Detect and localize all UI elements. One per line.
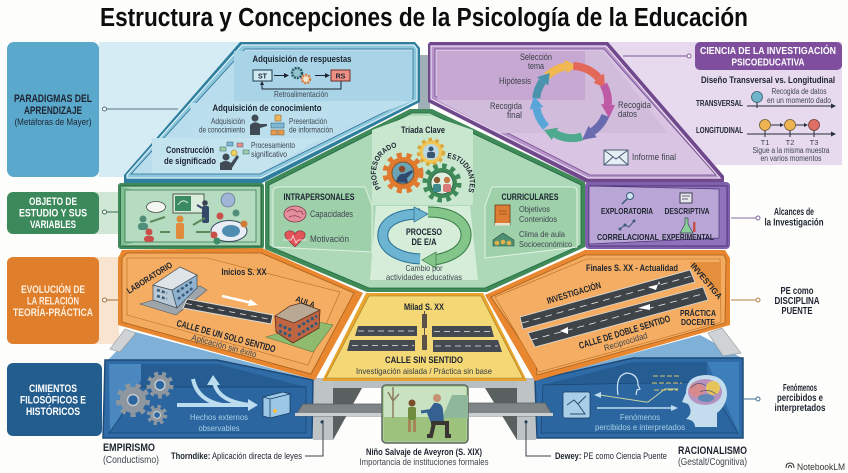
grey supports and light-blue slants [108, 55, 742, 440]
caption: empirismo [103, 442, 159, 466]
icon: orange gear teacher [385, 155, 421, 191]
block: construcción de significado: Construcción [166, 145, 214, 156]
label panel: paradigmas del aprendizaje: (Metáforas de Mayer) [14, 117, 92, 127]
panel: left orange laboratory street [118, 248, 363, 380]
icon: gears [118, 374, 172, 424]
box: intrapersonales: Motivación [310, 234, 349, 244]
panel: design research background: PSICOEDUCATIVA [732, 56, 805, 68]
block: adquisición de respuestas: ST [258, 74, 268, 80]
box: curriculares: CURRICULARES [502, 192, 558, 202]
text: cambio [386, 263, 462, 282]
panel: yellow street without direction: Milad S. XX [404, 302, 444, 312]
label panel: paradigmas del aprendizaje: APRENDIZAJE [24, 105, 82, 117]
block: adquisición de respuestas: RS [336, 74, 346, 80]
label: alcances [764, 207, 824, 228]
panel: right orange two-way street [485, 250, 730, 381]
caption: empirismo: (Conductismo) [103, 455, 159, 466]
icon: cube [263, 392, 290, 418]
box: curriculares: Objetivos [519, 204, 550, 214]
label: laboratorio: LABORATORIO [125, 259, 174, 296]
label panel: evolución teoría-práctica [7, 257, 119, 344]
cycle labels: final [507, 110, 522, 120]
label: alcances: la Investigación [764, 218, 824, 228]
panel: yellow street without direction: CALLE SIN SENTIDO [385, 355, 463, 366]
label: PE como disciplina puente: PUENTE [782, 306, 813, 317]
panel: left orange laboratory street: CALLE DE UN SOLO SENTIDO [175, 318, 277, 355]
box: curriculares [485, 187, 577, 258]
cycle labels: Selección [520, 52, 552, 62]
label panel: paradigmas del aprendizaje [7, 42, 250, 177]
block: adquisición de conocimiento: Adquisición [211, 116, 245, 126]
caption: dewey: Dewey: PE como Ciencia Puente [555, 451, 667, 461]
transversal timeline: Recogida de datos [772, 87, 826, 96]
block: construcción de significado [164, 140, 295, 170]
block: construcción de significado: de significado [164, 156, 216, 167]
panel: empirismo base: observables [198, 423, 240, 433]
transversal timeline [696, 87, 836, 108]
icon: correlation chart [618, 220, 636, 230]
icon: heart [283, 231, 307, 247]
panel: left orange laboratory street: Inicios S. XX [222, 267, 266, 277]
panel: yellow street without direction: Investigación aislada / Práctica sin base [356, 366, 492, 376]
box: curriculares: Socioeconómico [519, 239, 572, 249]
longitudinal timeline: Sigue a la misma muestra [752, 146, 830, 155]
block: construcción de significado: Procesamiento [251, 140, 295, 150]
arrows: external facts [177, 375, 258, 411]
longitudinal timeline: T2 [786, 138, 794, 147]
box: intrapersonales: Capacidades [310, 209, 353, 219]
caption: empirismo: EMPIRISMO [103, 442, 155, 454]
arrows: phenomena [594, 376, 682, 411]
panel: paradigmas trapezoid [124, 42, 420, 183]
box: curriculares: Contenidos [519, 214, 557, 224]
icon: laboratory building [140, 267, 207, 315]
icon: blackboard [173, 194, 204, 213]
road: two-way lower [528, 287, 708, 347]
panel: right orange two-way street: DOCENTE [681, 317, 715, 327]
panel: racionalismo base: Fenómenos [620, 412, 660, 422]
panel: right orange two-way street: PRÁCTICA [680, 308, 716, 318]
panel: left orange laboratory street: AULA [294, 294, 316, 310]
caption: racionalismo [678, 445, 747, 468]
icon: green gear students [425, 166, 459, 200]
icon: teacher [197, 200, 209, 223]
label panel: objeto de estudio: OBJETO DE [29, 196, 77, 208]
icon: round table [210, 220, 248, 244]
icon: thought cloud [146, 202, 166, 212]
caption: dewey [524, 420, 667, 461]
panel: right orange two-way street: INVESTIGACIÓN [545, 279, 602, 306]
caption: niño salvaje [360, 447, 489, 467]
caption: niño salvaje: Niño Salvaje de Aveyron (S. XIX) [366, 447, 482, 457]
label panel: cimientos filosóficos: HISTÓRICOS [26, 405, 80, 418]
label: fenómenos percibidos [744, 383, 826, 414]
longitudinal timeline: T3 [810, 138, 818, 147]
label panel: cimientos filosóficos: CIMIENTOS [29, 383, 77, 395]
arrow: one way [222, 296, 258, 306]
road sections [347, 326, 502, 352]
box: curriculares: Clima de aula [519, 229, 565, 239]
label: fenómenos percibidos: percibidos e [777, 393, 823, 404]
label: fenómenos percibidos: interpretados [774, 403, 826, 414]
box: intrapersonales: INTRAPERSONALES [284, 192, 354, 202]
panel: design research background [608, 42, 842, 165]
icon: book [495, 205, 510, 226]
panel: left orange laboratory street: Aplicación sin éxito [190, 332, 258, 359]
label panel: evolución teoría-práctica: TEORÍA-PRÁCTICA [13, 306, 93, 319]
cycle labels [490, 52, 651, 120]
caption: niño salvaje: Importancia de instituciones formales [360, 457, 489, 467]
cycle diagram [530, 60, 615, 140]
icon: perception box [563, 392, 590, 418]
transversal timeline: en un momento dado [767, 96, 831, 105]
label panel: cimientos filosóficos: FILOSÓFICOS E [20, 394, 86, 406]
block: adquisición de conocimiento: Presentación [289, 116, 327, 126]
label panel: paradigmas del aprendizaje: PARADIGMAS DEL [14, 93, 92, 105]
icon: envelope [604, 150, 628, 165]
caption: thorndike [171, 420, 324, 461]
panel: central green hexagon [265, 109, 585, 292]
icon: tower [422, 311, 427, 350]
road: one way [183, 299, 273, 324]
title: Estructura y Concepciones de la Psicología de la Educación [100, 4, 748, 32]
label: PE como disciplina puente: DISCIPLINA [774, 296, 820, 307]
panel: alcances de la investigación: EXPLORATORIA [601, 206, 653, 216]
longitudinal timeline: en varios momentos [760, 154, 822, 163]
label panel: evolución teoría-práctica: EVOLUCIÓN DE [21, 283, 85, 296]
panel: central green hexagon: Tríada Clave [401, 125, 445, 136]
block: adquisición de conocimiento: de información [289, 124, 333, 134]
panel: right orange two-way street: Finales S. XX - Actualidad [586, 263, 678, 273]
panel: objeto de estudio illustration [118, 183, 264, 249]
panel: empirismo base: Hechos externos [190, 412, 248, 422]
panel: niño salvaje picture [382, 385, 468, 443]
label panel: objeto de estudio: ESTUDIO Y SUS [19, 208, 87, 220]
panel: investigación trapezoid [428, 42, 724, 183]
cycle labels: Hipótesis [499, 76, 531, 86]
panel: alcances de la investigación [585, 182, 760, 249]
block: construcción de significado: significativo [251, 149, 287, 159]
panel: yellow street without direction [322, 293, 527, 381]
cycle labels: Recogida [490, 101, 522, 111]
panel: right orange two-way street: INVESTIGA [688, 261, 724, 301]
icon: brain head [682, 375, 727, 427]
transversal timeline: TRANSVERSAL [696, 99, 743, 108]
caption: racionalismo: RACIONALISMO [678, 445, 747, 457]
cycle labels: datos [618, 109, 637, 119]
icon: kneeling man [421, 394, 451, 436]
label panel: evolución teoría-práctica: LA RELACIÓN [27, 294, 79, 308]
cycle: proceso de E/A: DE E/A [412, 237, 437, 247]
panel: racionalismo base: percibidos e interpretados [595, 422, 685, 432]
longitudinal timeline: T1 [761, 138, 769, 147]
icon: small head [617, 373, 640, 395]
icon: document [680, 193, 692, 203]
label panel: objeto de estudio: VARIABLES [30, 219, 76, 231]
text: cambio: Cambio por [406, 263, 443, 273]
block: adquisición de conocimiento: de conocimiento [199, 124, 245, 134]
cycle labels: tema [528, 61, 544, 71]
label: PE como disciplina puente: PE como [780, 286, 814, 297]
block: adquisición de respuestas [252, 54, 352, 99]
panel: right orange two-way street: Reciprocidad [603, 330, 649, 353]
block: adquisición de respuestas: Adquisición de respuestas [252, 54, 352, 65]
longitudinal timeline: LONGITUDINAL [696, 126, 743, 135]
curved label: estudiantes: ESTUDIANTES [447, 152, 475, 192]
cycle: proceso de E/A: PROCESO [406, 227, 442, 237]
icon: group [493, 233, 514, 246]
panel: alcances de la investigación: DESCRIPTIVA [664, 206, 710, 216]
panel: right orange two-way street: CALLE DE DOBLE SENTIDO [578, 314, 672, 352]
road: two-way upper [520, 270, 695, 329]
longitudinal timeline [696, 120, 836, 163]
label: alcances: Alcances de [774, 207, 814, 218]
curved label: profesorado: PROFESORADO [370, 142, 396, 190]
icon: magnifier [622, 192, 634, 204]
cycle: proceso de E/A [383, 207, 466, 268]
block: adquisición de respuestas: Retroalimentación [274, 90, 328, 99]
icon: child [408, 400, 416, 432]
caption: thorndike: Thorndike: Aplicación directa de leyes [171, 451, 302, 461]
box: intrapersonales [273, 187, 372, 252]
arrows [150, 217, 210, 232]
panel: investigación trapezoid: Informe final [632, 152, 676, 162]
label: fenómenos percibidos: Fenómenos [783, 383, 817, 394]
cycle labels: Recogida [618, 100, 651, 110]
block: adquisición de conocimiento [199, 103, 333, 135]
bridge planks [295, 403, 553, 416]
label panel: cimientos filosóficos [7, 363, 102, 436]
logo: NotebookLM: NotebookLM [797, 462, 845, 472]
icon: classroom building [266, 303, 333, 352]
icon: brain [284, 206, 306, 222]
panel: alcances de la investigación: CORRELACIONAL [597, 232, 659, 242]
icon: students [138, 193, 240, 242]
block: adquisición de conocimiento: Adquisición de conocimiento [212, 103, 322, 114]
label panel: objeto de estudio [7, 192, 119, 234]
panel: racionalismo base [535, 358, 743, 438]
label: PE como disciplina puente [731, 286, 820, 317]
icon: yellow gear [418, 140, 444, 164]
panel: empirismo base [103, 360, 313, 438]
panel: alcances de la investigación: EXPERIMENTAL [662, 232, 714, 242]
text: cambio: actividades educativas [386, 272, 462, 282]
icon: flask [680, 218, 696, 233]
caption: racionalismo: (Gestalt/Cognitiva) [678, 457, 747, 468]
